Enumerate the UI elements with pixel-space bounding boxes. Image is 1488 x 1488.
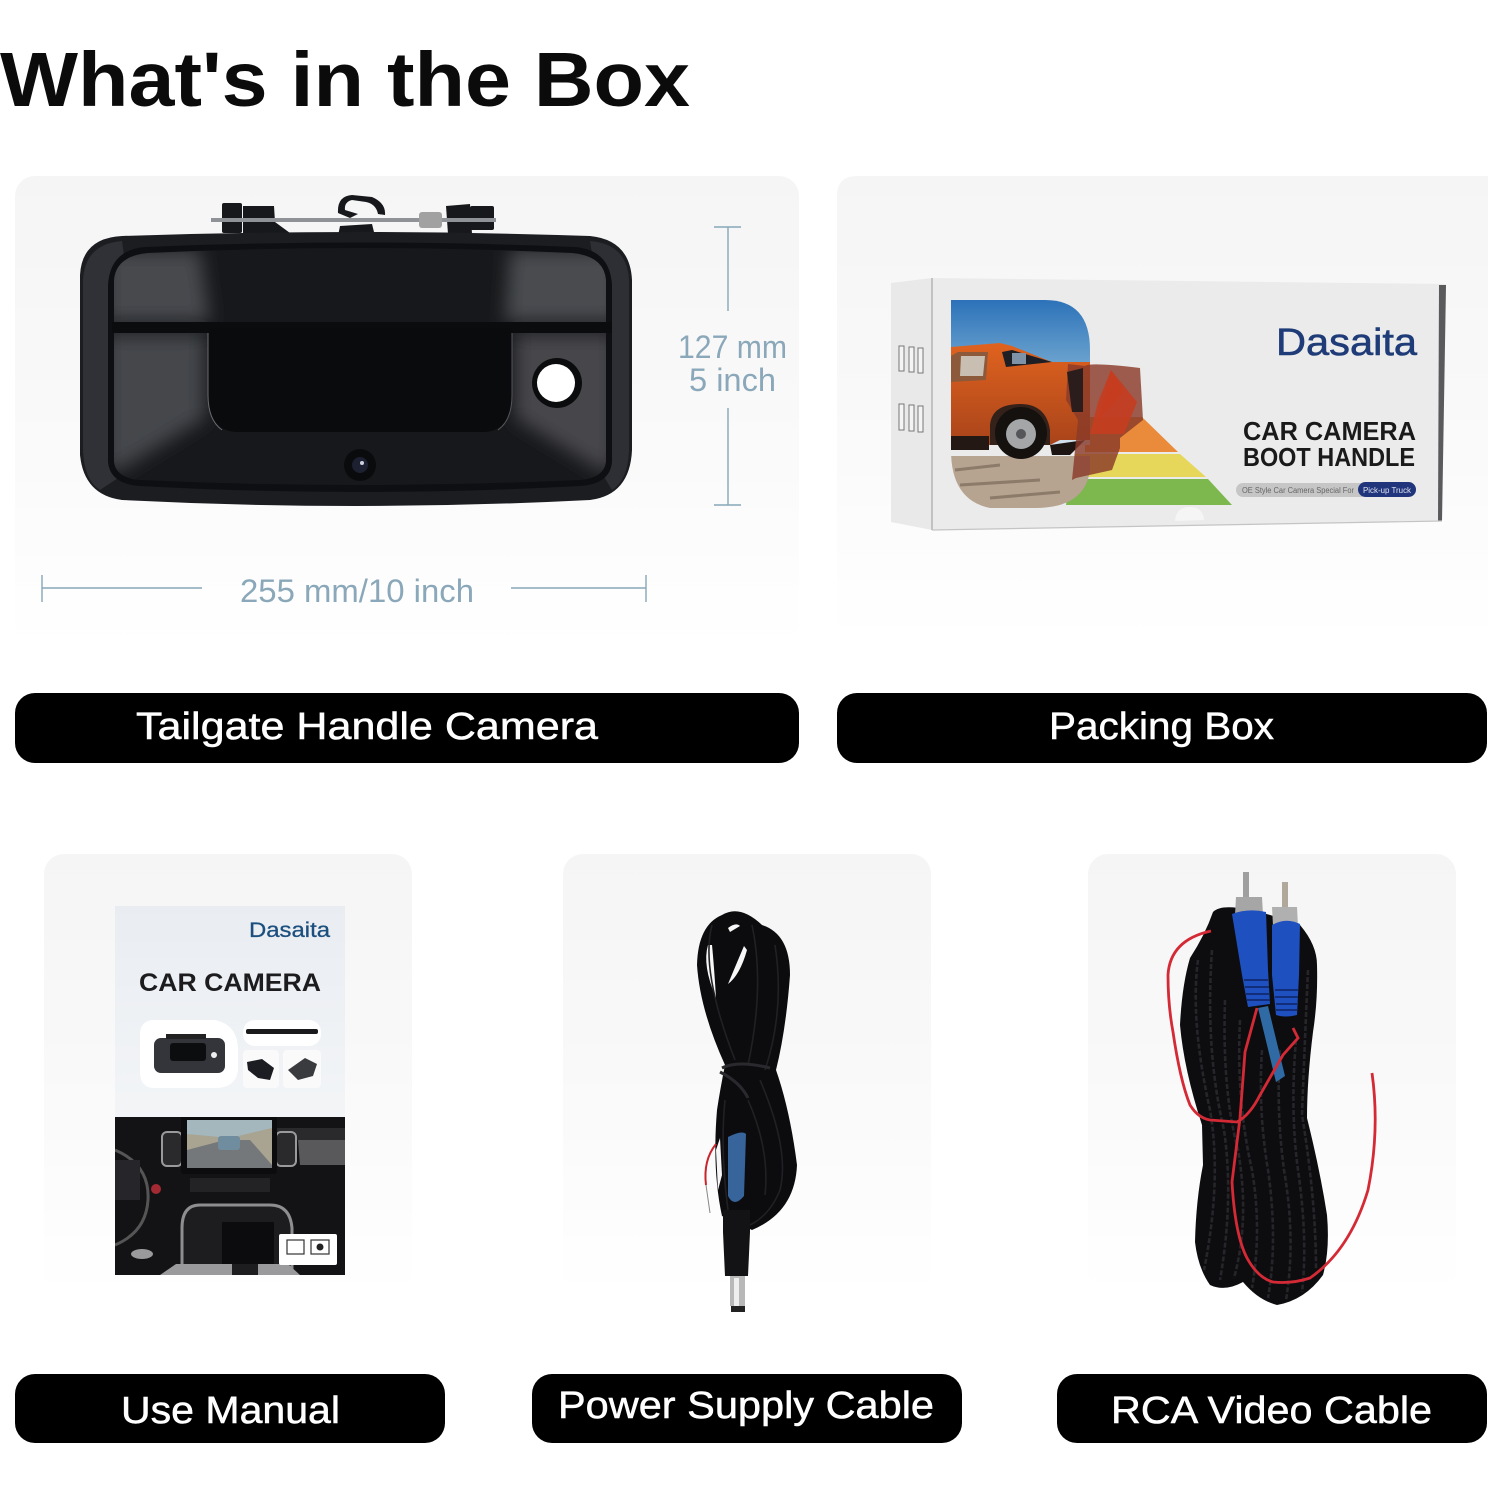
dimension: width: [42, 573, 646, 609]
panel: power supply cable: [563, 854, 931, 1312]
panel: rca video cable: [1088, 854, 1456, 1305]
manual product thumbnails: [140, 1020, 321, 1088]
parking view bands: [1066, 417, 1232, 505]
label: rca video cable: RCA Video Cable: [1111, 1390, 1432, 1432]
panel: use manual: [44, 854, 412, 1294]
box heading: [1243, 416, 1416, 472]
red wire: [1168, 931, 1375, 1282]
icon: tailgate handle camera: [80, 195, 632, 506]
title: What's in the Box: [0, 37, 690, 123]
label: power supply cable: Power Supply Cable: [558, 1385, 934, 1427]
icon: manual booklet: [115, 906, 345, 1275]
label: use manual: Use Manual: [121, 1390, 340, 1432]
box tagline: [1236, 482, 1416, 497]
label: use manual: [15, 1374, 445, 1443]
label: packing box: Packing Box: [1049, 706, 1274, 748]
dimension: height: [678, 227, 787, 505]
icon: manual booklet: Dasaita: [249, 919, 330, 942]
panel: packing box: [837, 176, 1488, 531]
icon: power cable coil: [697, 911, 797, 1312]
icon: packing box: [891, 278, 1446, 530]
label: rca video cable: [1057, 1374, 1487, 1443]
label: tailgate handle camera: Tailgate Handle Camera: [136, 706, 599, 748]
side panel icons: [899, 346, 923, 432]
box brand: Dasaita: [1276, 322, 1418, 364]
dimension: height: 127 mm: [678, 329, 787, 365]
dimension: height: 5 inch: [689, 362, 776, 398]
box tagline: Pick-up Truck: [1363, 486, 1412, 495]
label: tailgate handle camera: [15, 693, 799, 763]
tailgate overlay: [1066, 364, 1143, 480]
box photo: [951, 300, 1091, 510]
label: packing box: [837, 693, 1487, 763]
icon: manual booklet: CAR CAMERA: [139, 969, 321, 997]
dimension: width: 255 mm/10 inch: [240, 573, 474, 609]
manual dashboard photo: [115, 1116, 345, 1275]
icon: rca cable coil: [1168, 872, 1375, 1305]
panel: tailgate handle camera: [15, 176, 799, 646]
box tagline: OE Style Car Camera Special For: [1242, 486, 1354, 495]
rca plugs: [1232, 872, 1300, 1082]
label: power supply cable: [532, 1374, 962, 1443]
box heading: BOOT HANDLE: [1243, 442, 1415, 472]
box heading: CAR CAMERA: [1243, 416, 1416, 446]
